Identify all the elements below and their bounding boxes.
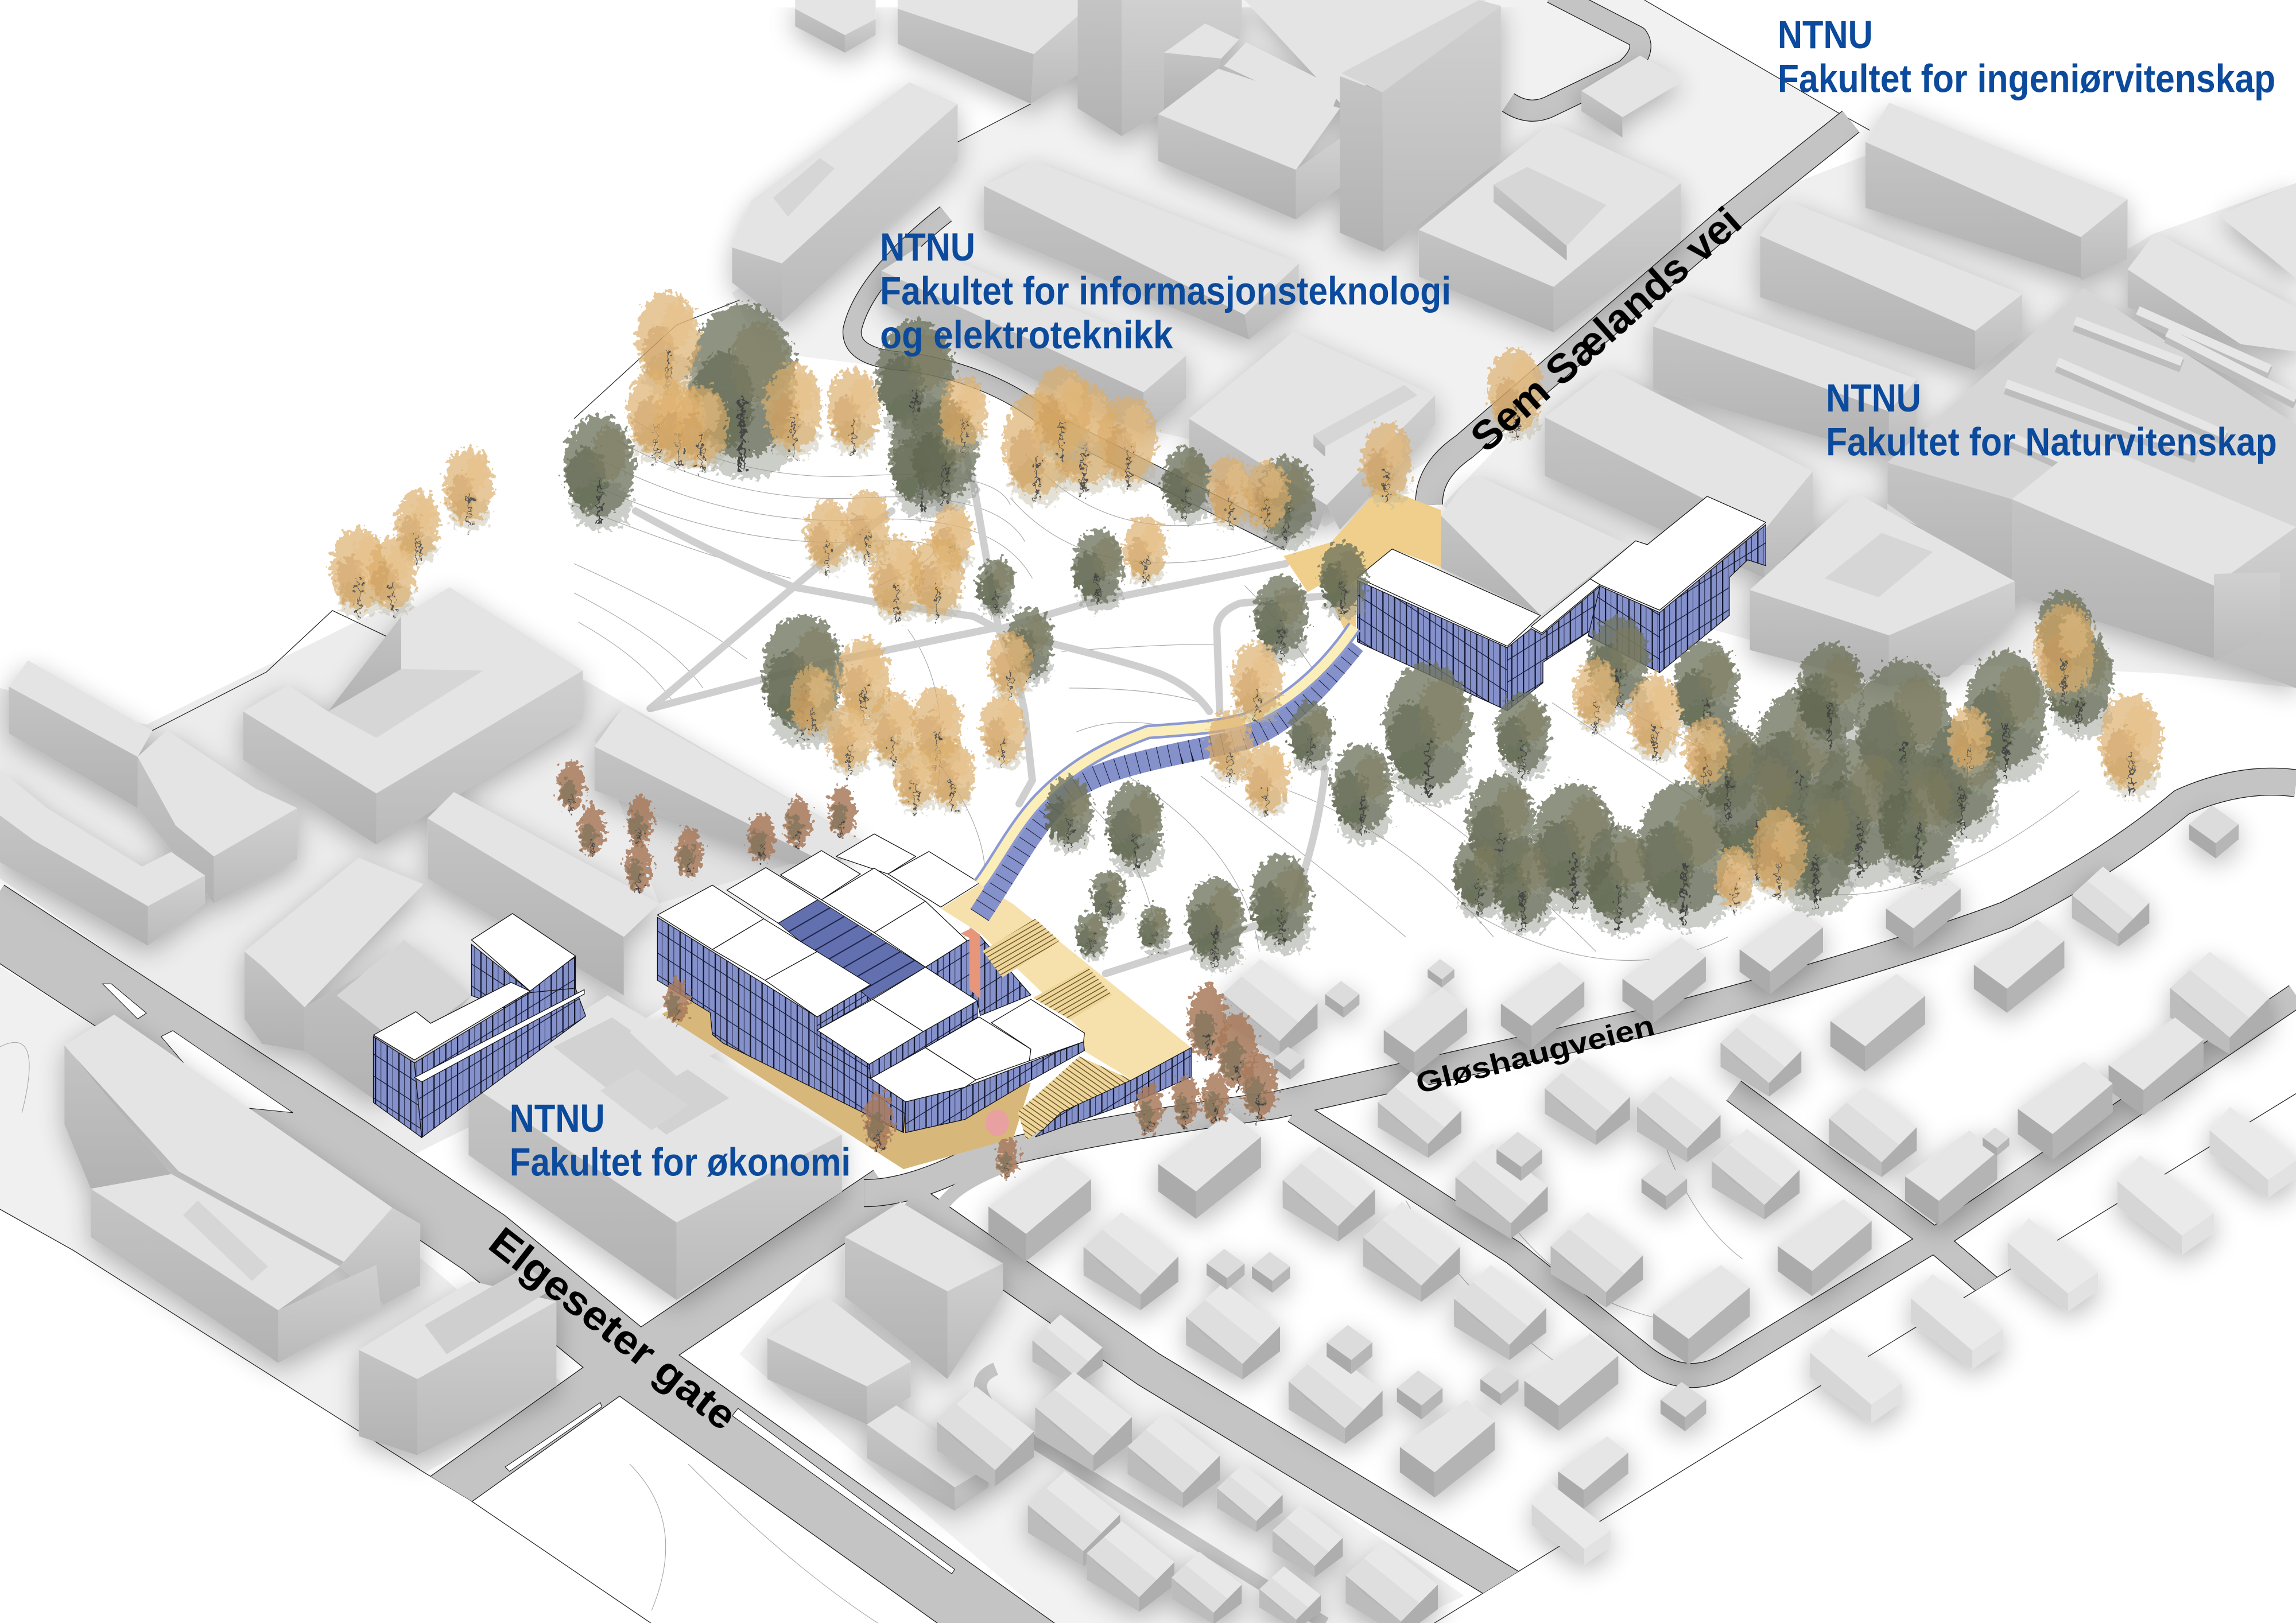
trees: green park trees [564,304,2113,971]
label: NTNU Fakultet for økonomi: NTNU [510,1096,605,1140]
roof panels [657,834,1084,1102]
trees: orange park trees [331,292,2162,911]
label: NTNU Fakultet for informasjonsteknologi og elektroteknikk: og elektroteknikk [880,313,1173,357]
label: NTNU Fakultet for økonomi: Fakultet for økonomi [510,1140,851,1184]
park paths [635,445,1327,973]
contour lines [0,417,2079,1623]
street label: Elgeseter gate: Elgeseter gate [480,1218,745,1439]
new building: small west wing [374,914,585,1137]
plaza: north end of bridge [1283,487,1441,633]
road islands [103,984,955,1574]
road: Elgeseter gate [0,914,1040,1623]
solar roof [778,900,925,999]
skywalk bridge [980,627,1355,915]
street label: Gløshaugveien: Gløshaugveien [1413,1009,1658,1100]
facade: inner courtyard glazing [925,937,1031,1015]
trees: red-brown street trees [558,762,1277,1179]
buildings: west housing rows [0,587,864,1300]
buildings: east faculty blocks [1441,103,2296,688]
houses: outside the site edge [1810,1107,2296,1423]
facade: south-west glazing [657,917,906,1132]
stairs: middle flight [1033,967,1112,1020]
label: NTNU Fakultet for informasjonsteknologi og elektroteknikk: NTNU [880,225,975,269]
new building: north faculty wing [1358,496,1766,710]
houses: residential area [937,805,2270,1623]
new building: main faculty complex [657,834,1191,1140]
facade: terrace base glazing [1035,1047,1191,1137]
stairs: upper flight [983,919,1060,977]
facade: curved south-east glazing [906,1042,1084,1132]
road: Sem Sælands vei [1429,0,1851,505]
label: NTNU Fakultet for informasjonsteknologi og elektroteknikk: Fakultet for informasjonsteknologi [880,269,1451,313]
label: NTNU Fakultet for ingeniørvitenskap: NTNU [1778,13,1873,57]
stairs: lower flight [1018,1057,1132,1140]
terrace with stairs [941,884,1191,1080]
stair core: salmon tower [960,928,980,999]
street label: Sem Sælands vei: Sem Sælands vei [1462,199,1750,461]
buildings: south cluster at crossing [767,1202,1003,1511]
tree: salmon blossom [986,1110,1009,1136]
rooftop plant bars [2006,314,2296,491]
plaza under main building [662,999,1031,1169]
buildings: north campus cluster [732,0,1684,530]
road: upper campus drive [852,213,1289,542]
road: Gløshaugveien and side streets [864,782,2296,1623]
buildings: south-west block west of Elgeseter gate [64,1015,556,1455]
facade: strips below upper roofs [817,985,871,1030]
label: NTNU Fakultet for Naturvitenskap: NTNU [1826,376,1921,420]
